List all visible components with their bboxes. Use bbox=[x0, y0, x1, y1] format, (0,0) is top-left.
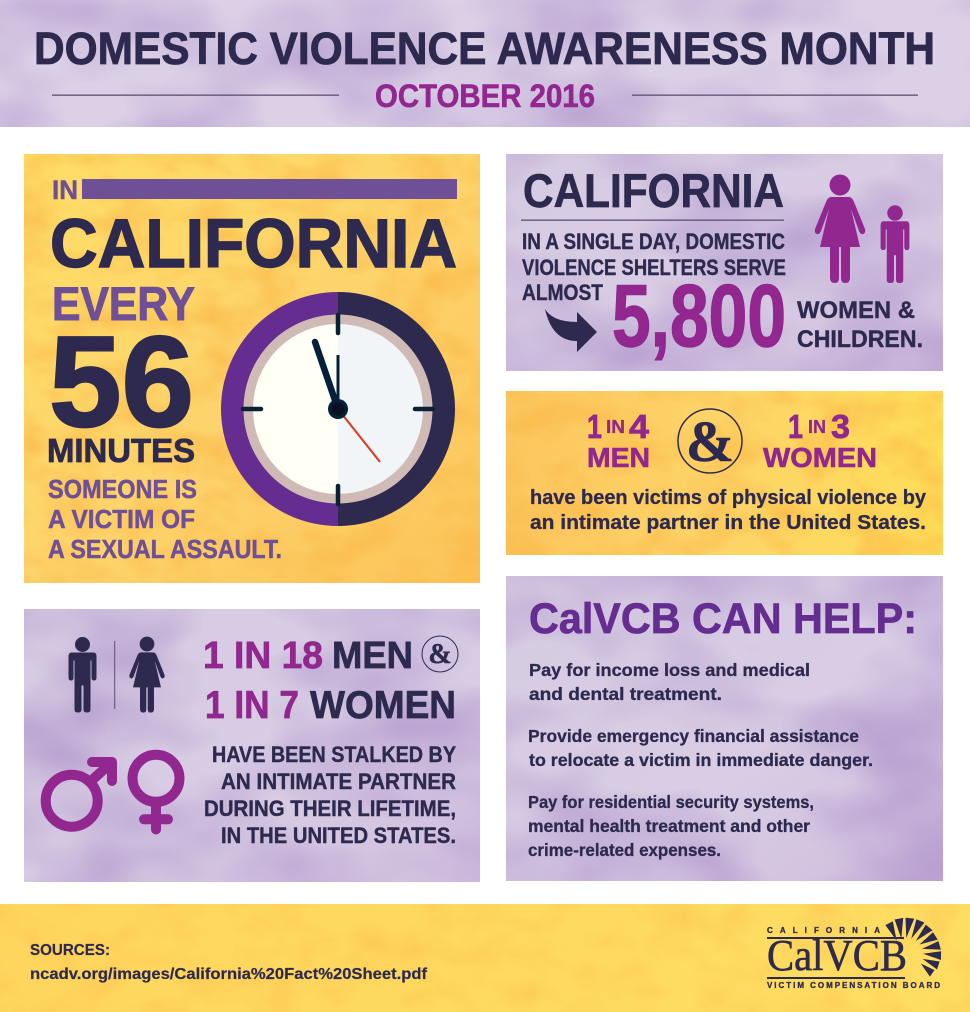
heading: CalVCB CAN HELP: bbox=[529, 595, 917, 643]
stat: 1 in 4 men: 4 bbox=[629, 408, 650, 445]
stat: 1 in 7 women: 1 IN 7 bbox=[205, 684, 299, 727]
help item: security: crime-related expenses. bbox=[528, 840, 721, 860]
stat: 1 in 4 men: MEN bbox=[587, 442, 650, 473]
icon: sun rays bbox=[885, 918, 941, 977]
heading: California: CALIFORNIA bbox=[50, 205, 457, 282]
shelter text: VIOLENCE SHELTERS SERVE bbox=[522, 255, 786, 280]
stat: 1 in 7 women: WOMEN bbox=[310, 684, 456, 727]
logo: CalVCB bbox=[767, 918, 941, 990]
statement text: A VICTIM OF bbox=[48, 504, 195, 534]
logo: CalVCB: CALIFORNIA bbox=[767, 926, 880, 935]
physical violence text bbox=[530, 487, 927, 534]
statement text: A SEXUAL ASSAULT. bbox=[48, 534, 282, 564]
help item: relocation bbox=[528, 726, 873, 770]
help item: security bbox=[528, 792, 814, 860]
stalking text: IN THE UNITED STATES. bbox=[221, 823, 456, 848]
shelter text: ALMOST bbox=[522, 280, 603, 305]
bar with IN bbox=[52, 175, 457, 205]
icon: woman bbox=[815, 174, 865, 283]
women and children text: CHILDREN. bbox=[797, 326, 923, 353]
icon: female symbol bbox=[132, 755, 180, 830]
shelter text: IN A SINGLE DAY, DOMESTIC bbox=[522, 229, 785, 254]
stat: 1 in 3 women: WOMEN bbox=[763, 442, 877, 473]
stat: 1 in 3 women: 3 bbox=[831, 408, 850, 445]
stalking text: HAVE BEEN STALKED BY bbox=[212, 742, 456, 767]
logo: CalVCB: CalVCB bbox=[767, 931, 907, 980]
stat: 1 in 18 men: MEN bbox=[332, 635, 413, 677]
footer band bbox=[0, 904, 970, 1012]
stat: 1 in 18 men bbox=[203, 635, 413, 677]
help item: security: mental health treatment and other bbox=[528, 816, 810, 836]
help item: security: Pay for residential security systems, bbox=[528, 792, 814, 812]
every: EVERY bbox=[52, 277, 195, 330]
help item: relocation: Provide emergency financial assistance bbox=[528, 726, 859, 746]
stat: 1 in 4 men: IN bbox=[606, 417, 625, 437]
icon: man bbox=[68, 637, 96, 712]
heading: California: CALIFORNIA bbox=[523, 164, 784, 217]
women and children text: WOMEN & bbox=[797, 297, 915, 324]
panel: California shelters bbox=[506, 154, 943, 371]
minutes: MINUTES bbox=[47, 432, 195, 469]
panel: 1 in 4 men and 1 in 3 women bbox=[506, 391, 943, 555]
stat: 1 in 4 men: 1 bbox=[587, 408, 602, 445]
logo: CalVCB: VICTIM COMPENSATION BOARD bbox=[767, 981, 940, 990]
statement text bbox=[48, 474, 282, 564]
icon: woman bbox=[129, 637, 165, 713]
physical violence text: have been victims of physical violence by bbox=[530, 487, 927, 509]
left rule bbox=[52, 94, 339, 96]
ampersand badge: & bbox=[428, 639, 452, 670]
stalking text bbox=[204, 742, 456, 848]
sources: ncadv.org/images/California%20Fact%20Sheet.pdf bbox=[30, 966, 428, 983]
right rule bbox=[632, 94, 918, 96]
header banner bbox=[0, 0, 970, 127]
stat: 1 in 3 women: IN bbox=[808, 417, 826, 437]
number 5,800: 5,800 bbox=[612, 266, 786, 365]
help item: income loss: Pay for income loss and medical bbox=[529, 660, 810, 680]
stat: 1 in 7 women bbox=[205, 684, 456, 727]
icon: clock bbox=[221, 292, 455, 526]
panel: every 56 minutes bbox=[24, 154, 480, 583]
statement text: SOMEONE IS bbox=[48, 474, 197, 504]
stalking text: AN INTIMATE PARTNER bbox=[221, 769, 456, 794]
stat: 1 in 18 men: 1 IN 18 bbox=[203, 635, 323, 677]
help item: income loss bbox=[529, 660, 810, 704]
panel: CalVCB can help bbox=[506, 576, 943, 881]
icon: child bbox=[881, 205, 909, 283]
stalking text: DURING THEIR LIFETIME, bbox=[204, 796, 456, 821]
ampersand badge bbox=[422, 636, 458, 672]
stat: 1 in 3 women: 1 bbox=[788, 408, 803, 445]
sources bbox=[30, 942, 428, 983]
sources: SOURCES: bbox=[30, 942, 110, 959]
bar with IN: IN bbox=[52, 175, 78, 205]
shelter text bbox=[522, 229, 786, 305]
help item: income loss: and dental treatment. bbox=[529, 684, 722, 704]
help item: relocation: to relocate a victim in immediate danger. bbox=[529, 750, 873, 770]
physical violence text: an intimate partner in the United States. bbox=[530, 512, 926, 534]
title: DOMESTIC VIOLENCE AWARENESS MONTH bbox=[34, 23, 935, 74]
stat: 1 in 3 women bbox=[763, 408, 877, 473]
number 56: 56 bbox=[49, 310, 194, 454]
date subtitle: OCTOBER 2016 bbox=[375, 78, 595, 114]
panel: stalking bbox=[24, 609, 480, 882]
icon: male symbol bbox=[46, 762, 112, 827]
women and children text bbox=[797, 297, 923, 353]
stat: 1 in 4 men bbox=[587, 408, 650, 473]
ampersand badge: & bbox=[686, 409, 734, 474]
icon: curved arrow bbox=[545, 309, 597, 352]
